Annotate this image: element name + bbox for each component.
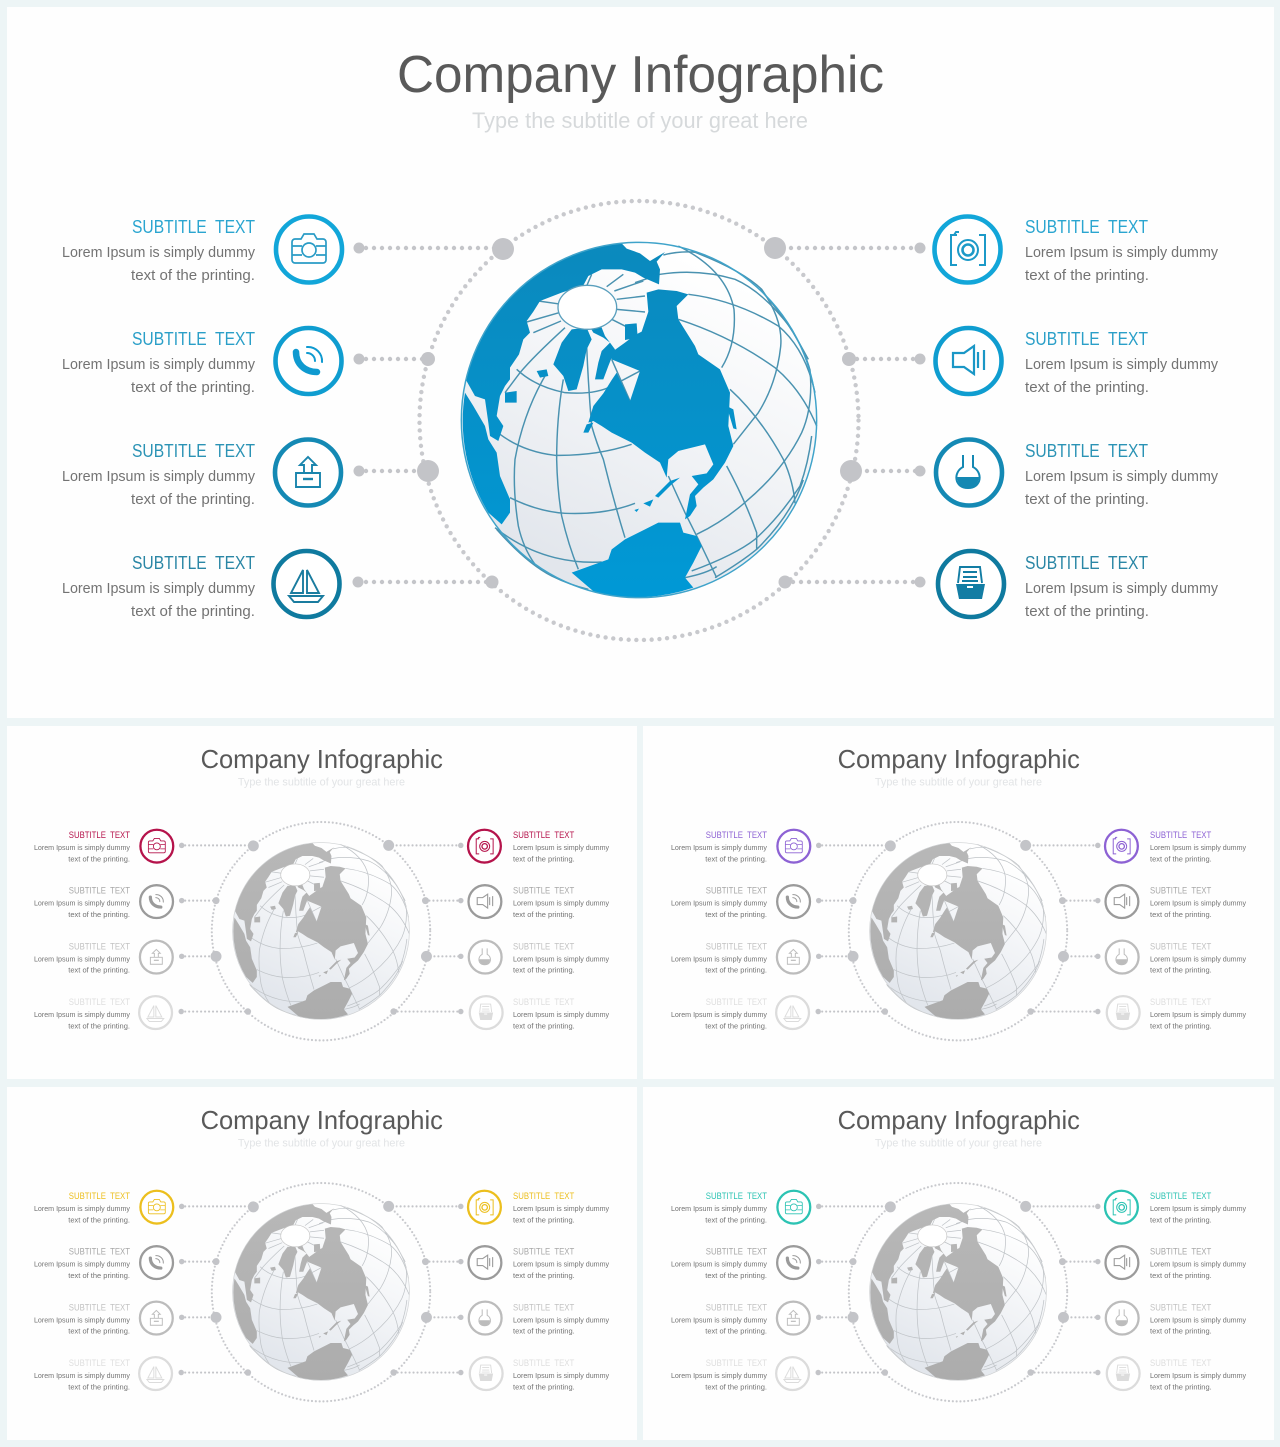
dotted ring and connectors	[178, 1183, 464, 1401]
item: left 2 phone	[62, 328, 342, 396]
title: Company Infographic	[838, 1107, 1080, 1135]
panel: main blue slide	[7, 7, 1274, 718]
items: right column: text of the printing.	[1150, 910, 1212, 919]
items: right column: Lorem Ipsum is simply dummy	[513, 1204, 609, 1213]
items: left column: text of the printing.	[68, 1021, 130, 1030]
items: left column: text of the printing.	[68, 1271, 130, 1280]
items: right column: SUBTITLE TEXT	[513, 1191, 575, 1201]
panel: crimson variant	[7, 726, 637, 1079]
title: Company Infographic	[838, 746, 1080, 774]
items: right column: Lorem Ipsum is simply dummy	[1150, 954, 1246, 963]
items: left column: SUBTITLE TEXT	[706, 886, 767, 896]
items: left column: Lorem Ipsum is simply dummy	[671, 899, 767, 908]
items: right column: SUBTITLE TEXT	[513, 1358, 575, 1368]
items: left column	[671, 1191, 810, 1391]
items: right column: SUBTITLE TEXT	[513, 1247, 575, 1257]
dotted ring and connectors	[815, 1183, 1101, 1401]
item: left 1 camera: SUBTITLE TEXT	[132, 216, 255, 237]
items: right column: text of the printing.	[1150, 1327, 1212, 1336]
items: left column	[671, 830, 810, 1030]
items: right column: text of the printing.	[1150, 1382, 1212, 1391]
items: left column: Lorem Ipsum is simply dummy	[34, 1371, 130, 1380]
items: left column: Lorem Ipsum is simply dummy	[671, 843, 767, 852]
items: right column: text of the printing.	[513, 966, 575, 975]
items: right column: SUBTITLE TEXT	[1150, 1191, 1212, 1201]
items: left column: SUBTITLE TEXT	[69, 1358, 130, 1368]
items: left column: SUBTITLE TEXT	[706, 1302, 767, 1312]
panel: teal variant	[643, 1087, 1274, 1440]
item: left 1 camera	[62, 216, 342, 284]
items: left column: Lorem Ipsum is simply dummy	[34, 843, 130, 852]
item: right 1 camera: SUBTITLE TEXT	[1025, 216, 1148, 237]
items: left column: text of the printing.	[68, 1327, 130, 1336]
item: right 3 flask: SUBTITLE TEXT	[1025, 440, 1148, 461]
items: right column: text of the printing.	[1150, 1215, 1212, 1224]
items: left column: text of the printing.	[705, 854, 767, 863]
items: right column	[468, 1191, 609, 1391]
items: right column: Lorem Ipsum is simply dummy	[513, 954, 609, 963]
items: right column: text of the printing.	[513, 1021, 575, 1030]
dotted ring and connectors	[352, 201, 926, 640]
items: left column	[34, 830, 173, 1030]
items: right column: text of the printing.	[513, 1271, 575, 1280]
items: left column	[34, 1191, 173, 1391]
globe illustration	[233, 1204, 409, 1380]
item: left 3 box: SUBTITLE TEXT	[132, 440, 255, 461]
items: right column: SUBTITLE TEXT	[513, 997, 575, 1007]
item: right 4 tray: text of the printing.	[1025, 603, 1149, 620]
subtitle: Type the subtitle of your great here	[875, 777, 1042, 789]
items: left column: SUBTITLE TEXT	[69, 886, 130, 896]
items: left column: text of the printing.	[705, 1215, 767, 1224]
item: right 1 camera: Lorem Ipsum is simply dummy	[1025, 244, 1218, 261]
items: right column: SUBTITLE TEXT	[513, 886, 575, 896]
items: right column: text of the printing.	[1150, 1271, 1212, 1280]
items: left column: SUBTITLE TEXT	[69, 1191, 130, 1201]
items: left column: text of the printing.	[68, 854, 130, 863]
items: left column: SUBTITLE TEXT	[706, 941, 767, 951]
item: left 2 phone: text of the printing.	[131, 379, 255, 396]
items: right column: Lorem Ipsum is simply dummy	[513, 1010, 609, 1019]
items: left column: text of the printing.	[705, 910, 767, 919]
item: left 3 box: Lorem Ipsum is simply dummy	[62, 468, 255, 485]
items: left column: Lorem Ipsum is simply dummy	[671, 1010, 767, 1019]
item: right 2 speaker: SUBTITLE TEXT	[1025, 328, 1148, 349]
item: left 3 box: text of the printing.	[131, 491, 255, 508]
items: right column: text of the printing.	[1150, 966, 1212, 975]
item: right 4 tray: Lorem Ipsum is simply dummy	[1025, 580, 1218, 597]
item: right 4 tray	[938, 551, 1218, 620]
items: left column: SUBTITLE TEXT	[706, 830, 767, 840]
item: left 4 boat: Lorem Ipsum is simply dummy	[62, 580, 255, 597]
items: left column: SUBTITLE TEXT	[706, 1247, 767, 1257]
items: right column: text of the printing.	[1150, 1021, 1212, 1030]
items: left column: SUBTITLE TEXT	[706, 997, 767, 1007]
item: right 2 speaker: text of the printing.	[1025, 379, 1149, 396]
items: right column: text of the printing.	[513, 910, 575, 919]
items: right column: SUBTITLE TEXT	[1150, 941, 1212, 951]
item: right 3 flask: Lorem Ipsum is simply dummy	[1025, 468, 1218, 485]
items: right column	[1105, 1191, 1246, 1391]
item: left 2 phone: SUBTITLE TEXT	[132, 328, 255, 349]
items: right column: text of the printing.	[513, 854, 575, 863]
item: left 4 boat: SUBTITLE TEXT	[132, 552, 255, 573]
item: left 2 phone: Lorem Ipsum is simply dummy	[62, 356, 255, 373]
title: Company Infographic	[201, 746, 443, 774]
item: right 4 tray: SUBTITLE TEXT	[1025, 552, 1148, 573]
items: right column: Lorem Ipsum is simply dummy	[1150, 1204, 1246, 1213]
items: right column: Lorem Ipsum is simply dummy	[1150, 1010, 1246, 1019]
items: left column: SUBTITLE TEXT	[69, 1302, 130, 1312]
items: left column: text of the printing.	[68, 966, 130, 975]
items: right column: Lorem Ipsum is simply dummy	[1150, 1315, 1246, 1324]
title: Company Infographic	[397, 46, 884, 104]
items: left column: Lorem Ipsum is simply dummy	[671, 1204, 767, 1213]
items: left column: Lorem Ipsum is simply dummy	[34, 954, 130, 963]
items: left column: text of the printing.	[68, 910, 130, 919]
items: right column: SUBTITLE TEXT	[513, 830, 575, 840]
dotted ring and connectors	[178, 822, 464, 1040]
items: left column: SUBTITLE TEXT	[69, 830, 130, 840]
items: right column: Lorem Ipsum is simply dummy	[513, 1371, 609, 1380]
items: right column: SUBTITLE TEXT	[1150, 997, 1212, 1007]
items: left column: Lorem Ipsum is simply dummy	[34, 1204, 130, 1213]
items: right column: text of the printing.	[1150, 854, 1212, 863]
items: left column: text of the printing.	[705, 1021, 767, 1030]
items: left column: text of the printing.	[68, 1382, 130, 1391]
items: right column: Lorem Ipsum is simply dummy	[513, 899, 609, 908]
items: left column: Lorem Ipsum is simply dummy	[671, 954, 767, 963]
items: left column: text of the printing.	[705, 966, 767, 975]
item: left 4 boat	[62, 551, 340, 620]
items: right column	[468, 830, 609, 1030]
items: right column: SUBTITLE TEXT	[513, 1302, 575, 1312]
items: right column: SUBTITLE TEXT	[1150, 1302, 1212, 1312]
items: left column: Lorem Ipsum is simply dummy	[34, 899, 130, 908]
items: right column: Lorem Ipsum is simply dummy	[1150, 899, 1246, 908]
subtitle: Type the subtitle of your great here	[238, 777, 405, 789]
items: left column: Lorem Ipsum is simply dummy	[34, 1010, 130, 1019]
items: left column: text of the printing.	[705, 1271, 767, 1280]
globe illustration	[461, 242, 817, 598]
item: left 1 camera: text of the printing.	[131, 267, 255, 284]
item: right 1 camera	[934, 216, 1218, 284]
globe illustration	[233, 843, 409, 1019]
globe illustration	[870, 1204, 1046, 1380]
items: left column: text of the printing.	[68, 1215, 130, 1224]
item: right 2 speaker: Lorem Ipsum is simply dummy	[1025, 356, 1218, 373]
items: left column: SUBTITLE TEXT	[69, 941, 130, 951]
items: right column: Lorem Ipsum is simply dummy	[513, 1315, 609, 1324]
subtitle: Type the subtitle of your great here	[238, 1138, 405, 1150]
items: left column: SUBTITLE TEXT	[69, 1247, 130, 1257]
items: right column: SUBTITLE TEXT	[1150, 1247, 1212, 1257]
panel: purple variant	[643, 726, 1274, 1079]
items: right column	[1105, 830, 1246, 1030]
items: right column: Lorem Ipsum is simply dummy	[1150, 843, 1246, 852]
items: left column: SUBTITLE TEXT	[706, 1191, 767, 1201]
items: right column: Lorem Ipsum is simply dummy	[513, 843, 609, 852]
items: right column: text of the printing.	[513, 1327, 575, 1336]
items: left column: Lorem Ipsum is simply dummy	[34, 1315, 130, 1324]
items: right column: text of the printing.	[513, 1382, 575, 1391]
items: left column: text of the printing.	[705, 1327, 767, 1336]
items: right column: Lorem Ipsum is simply dummy	[513, 1260, 609, 1269]
items: left column: Lorem Ipsum is simply dummy	[671, 1371, 767, 1380]
item: left 4 boat: text of the printing.	[131, 603, 255, 620]
item: right 2 speaker	[936, 328, 1218, 396]
items: right column: text of the printing.	[513, 1215, 575, 1224]
items: left column: Lorem Ipsum is simply dummy	[671, 1260, 767, 1269]
items: left column: SUBTITLE TEXT	[69, 997, 130, 1007]
item: right 1 camera: text of the printing.	[1025, 267, 1149, 284]
subtitle: Type the subtitle of your great here	[472, 108, 808, 133]
items: right column: SUBTITLE TEXT	[1150, 886, 1212, 896]
items: left column: SUBTITLE TEXT	[706, 1358, 767, 1368]
item: left 1 camera: Lorem Ipsum is simply dummy	[62, 244, 255, 261]
item: left 3 box	[62, 440, 341, 508]
subtitle: Type the subtitle of your great here	[875, 1138, 1042, 1150]
items: right column: SUBTITLE TEXT	[1150, 1358, 1212, 1368]
title: Company Infographic	[201, 1107, 443, 1135]
items: right column: Lorem Ipsum is simply dummy	[1150, 1260, 1246, 1269]
items: right column: Lorem Ipsum is simply dummy	[1150, 1371, 1246, 1380]
panel: yellow variant	[7, 1087, 637, 1440]
items: right column: SUBTITLE TEXT	[1150, 830, 1212, 840]
dotted ring and connectors	[815, 822, 1101, 1040]
item: right 3 flask	[936, 440, 1218, 508]
globe illustration	[870, 843, 1046, 1019]
items: left column: Lorem Ipsum is simply dummy	[671, 1315, 767, 1324]
items: left column: Lorem Ipsum is simply dummy	[34, 1260, 130, 1269]
items: right column: SUBTITLE TEXT	[513, 941, 575, 951]
item: right 3 flask: text of the printing.	[1025, 491, 1149, 508]
items: left column: text of the printing.	[705, 1382, 767, 1391]
